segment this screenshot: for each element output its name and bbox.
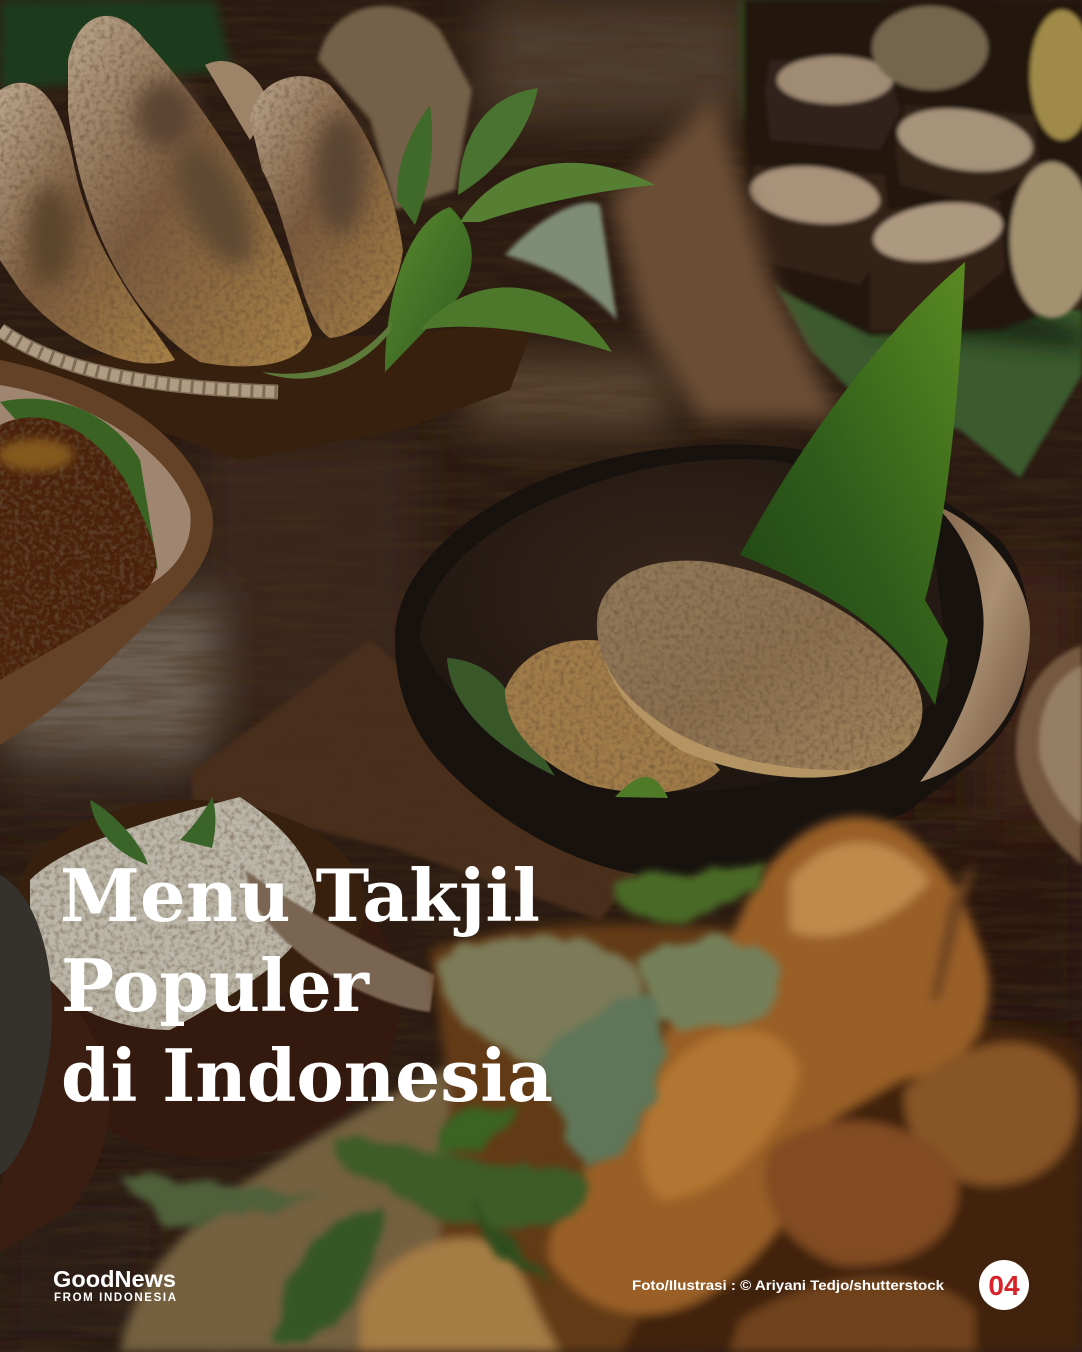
wood board — [192, 640, 640, 920]
title: Populer — [61, 943, 370, 1028]
logo: GoodNews from Indonesia: GoodNews — [53, 1266, 176, 1292]
logo: GoodNews from Indonesia: FROM INDONESIA — [54, 1292, 176, 1304]
page number badge: 04 — [988, 1270, 1020, 1301]
left bowl with brown sugar cake — [0, 360, 213, 745]
pastries — [0, 6, 472, 366]
page number badge — [979, 1260, 1029, 1310]
right bowl edge — [1016, 645, 1082, 865]
small leaves — [447, 658, 555, 776]
title: Menu Takjil — [60, 853, 540, 938]
woven rim — [0, 330, 278, 392]
bottom left: coconut bowl and plate — [0, 797, 435, 1252]
logo: GoodNews from Indonesia — [53, 1266, 176, 1304]
mint leaves — [262, 88, 655, 379]
title — [60, 853, 553, 1118]
photo credit: Foto/Ilustrasi : © Ariyani Tedjo/shutterstock — [632, 1277, 944, 1293]
title: di Indonesia — [61, 1033, 553, 1118]
centre bowl with kue — [395, 262, 1030, 877]
bottom foreground: blurred fried snacks — [120, 817, 1082, 1352]
top right: taro on banana leaf — [740, 0, 1082, 478]
front cake — [600, 640, 880, 778]
cilantro garnish — [115, 860, 780, 1340]
block beside taro — [610, 95, 840, 420]
top left basket — [0, 0, 655, 460]
back cake — [505, 640, 720, 793]
pointed banana leaf — [740, 262, 965, 705]
